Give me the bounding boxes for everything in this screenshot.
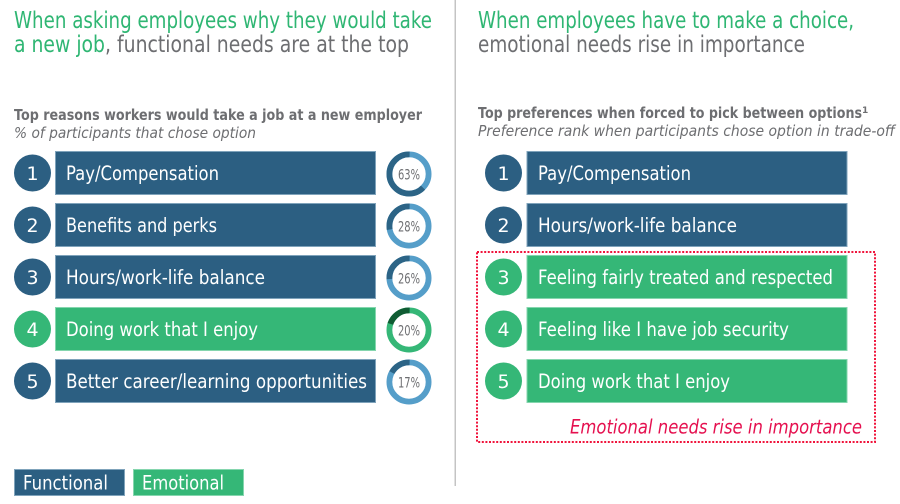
donut 17% bbox=[389, 362, 429, 402]
right row 4: job security: Feeling like I have job security bbox=[538, 318, 789, 341]
left row 2: benefits: 2 bbox=[26, 215, 39, 237]
left row 3: hours: Hours/work-life balance bbox=[66, 266, 265, 289]
right row 3: fairly treated: 3 bbox=[497, 267, 510, 289]
right row 1: pay bbox=[485, 152, 847, 194]
right row 5: enjoy work: Doing work that I enjoy bbox=[538, 370, 730, 393]
dotted callout box: emotional needs bbox=[477, 252, 875, 442]
left chart subtitle: Top reasons workers would take a job at a new employer bbox=[14, 106, 423, 124]
donut 28%: 28% bbox=[398, 220, 420, 236]
left row 5: career: 5 bbox=[26, 371, 39, 393]
right row 3: fairly treated bbox=[485, 256, 847, 298]
right row 1: pay: 1 bbox=[497, 163, 510, 185]
legend bbox=[14, 470, 244, 496]
right row 5: enjoy work: 5 bbox=[497, 371, 510, 393]
right title: emotional needs rise in importance bbox=[478, 32, 805, 58]
right row 4: job security: 4 bbox=[497, 319, 510, 341]
left row 4: enjoy work: 4 bbox=[26, 319, 39, 341]
donut 63%: 63% bbox=[398, 168, 420, 184]
right chart subtitle: 1 bbox=[862, 106, 868, 116]
right title bbox=[478, 8, 854, 58]
donut 26%: 26% bbox=[398, 272, 420, 288]
left row 2: benefits bbox=[14, 204, 376, 246]
left row 4: enjoy work: Doing work that I enjoy bbox=[66, 318, 258, 341]
left title bbox=[14, 8, 432, 58]
left row 5: career: Better career/learning opportunities bbox=[66, 370, 367, 393]
left chart subtitle bbox=[14, 106, 423, 142]
donut 63% bbox=[389, 154, 429, 194]
right row 2: hours bbox=[485, 204, 847, 246]
right row 2: hours: 2 bbox=[497, 215, 510, 237]
legend: functional: Functional bbox=[23, 472, 108, 494]
right row 4: job security bbox=[485, 308, 847, 350]
donut 17%: 17% bbox=[398, 376, 420, 392]
left row 1: pay bbox=[14, 152, 376, 194]
left row 1: pay: Pay/Compensation bbox=[66, 162, 219, 185]
left chart subtitle: % of participants that chose option bbox=[14, 124, 256, 142]
left title: , functional needs are at the top bbox=[105, 32, 409, 58]
left row 4: enjoy work bbox=[14, 308, 376, 350]
right row 3: fairly treated: Feeling fairly treated and respected bbox=[538, 266, 833, 289]
donut 20% bbox=[389, 310, 429, 350]
right row 1: pay: Pay/Compensation bbox=[538, 162, 691, 185]
right row 5: enjoy work bbox=[485, 360, 847, 402]
left title: When asking employees why they would take bbox=[14, 8, 432, 34]
left row 5: career bbox=[14, 360, 376, 402]
panel: left, why take a new job bbox=[14, 8, 432, 402]
left row 2: benefits: Benefits and perks bbox=[66, 214, 217, 237]
legend: emotional: Emotional bbox=[142, 472, 224, 494]
right row 2: hours: Hours/work-life balance bbox=[538, 214, 737, 237]
right chart subtitle bbox=[478, 104, 897, 140]
panel: right, forced choice bbox=[477, 8, 897, 442]
donut 26% bbox=[389, 258, 429, 298]
left row 1: pay: 1 bbox=[26, 163, 39, 185]
donut 28% bbox=[389, 206, 429, 246]
donut 20%: 20% bbox=[398, 324, 420, 340]
left row 3: hours bbox=[14, 256, 376, 298]
left row 3: hours: 3 bbox=[26, 267, 39, 289]
left title: a new job bbox=[14, 32, 105, 58]
